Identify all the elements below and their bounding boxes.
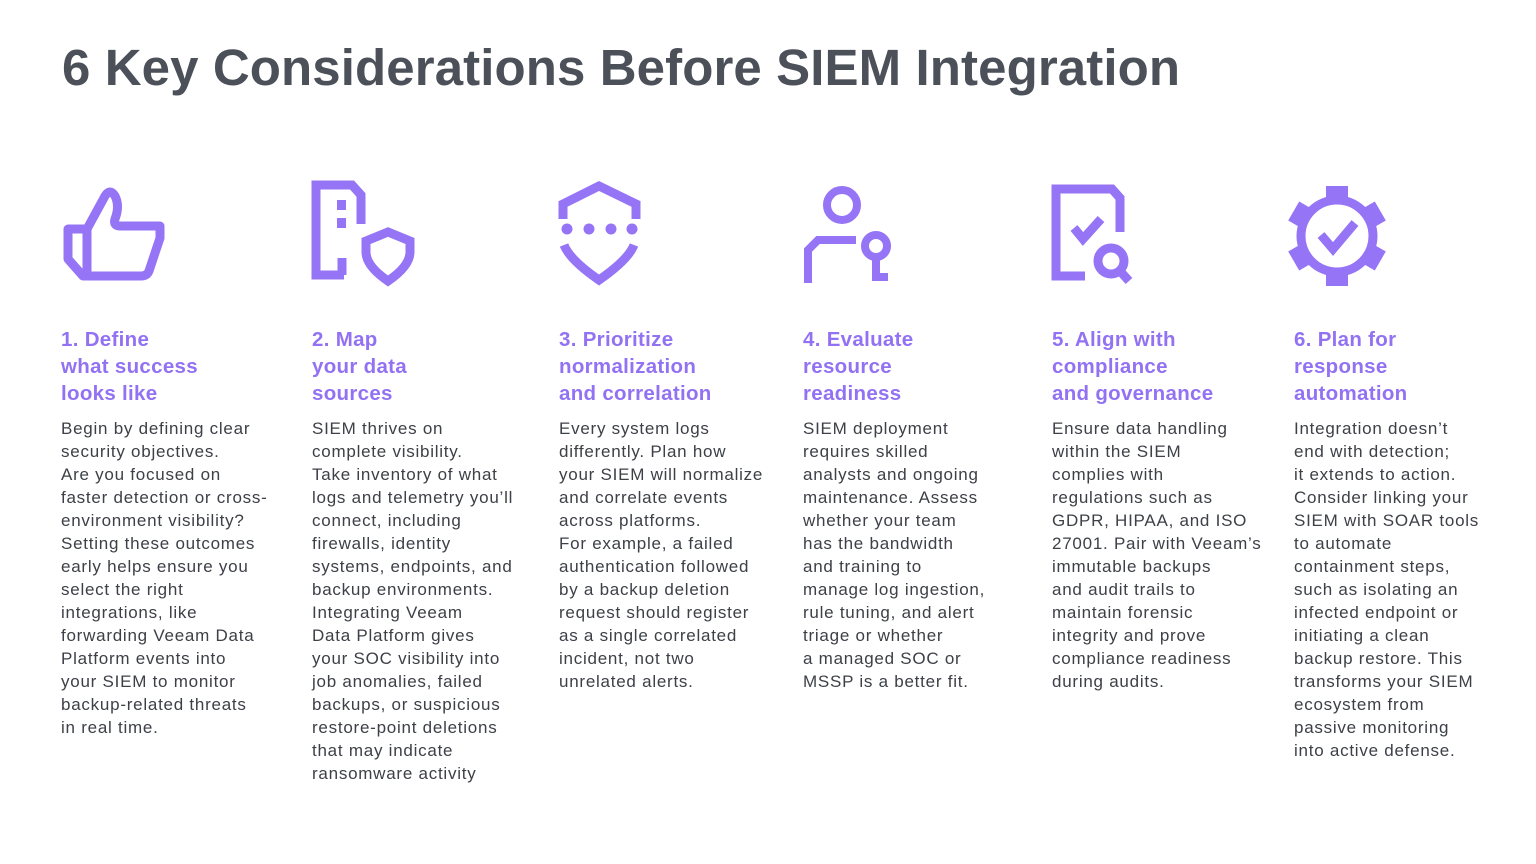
column 3: 3. Prioritize [559, 328, 673, 351]
column 3: and correlation [559, 382, 712, 405]
column 1 [61, 328, 268, 737]
column 2: job anomalies, failed [312, 672, 483, 691]
column 1: forwarding Veeam Data [61, 626, 254, 645]
column 5: compliance readiness [1052, 649, 1231, 668]
column 1: security objectives. [61, 442, 220, 461]
column 6: passive monitoring [1294, 718, 1449, 737]
column 1: backup-related threats [61, 695, 247, 714]
column 1: Platform events into [61, 649, 226, 668]
column 5: and audit trails to [1052, 580, 1196, 599]
column 5: maintain forensic [1052, 603, 1193, 622]
column 6: to automate [1294, 534, 1392, 553]
column 2: backup environments. [312, 580, 493, 599]
column 1: Are you focused on [61, 465, 221, 484]
column 1: faster detection or cross- [61, 488, 268, 507]
column 1: early helps ensure you [61, 557, 249, 576]
column 3: across platforms. [559, 511, 701, 530]
column 5: regulations such as [1052, 488, 1213, 507]
column 1: Begin by defining clear [61, 419, 250, 438]
column 4: triage or whether [803, 626, 943, 645]
column 4: whether your team [803, 511, 957, 530]
column 3: differently. Plan how [559, 442, 726, 461]
column 3: Every system logs [559, 419, 710, 438]
column 4: and training to [803, 557, 922, 576]
column 2: backups, or suspicious [312, 695, 500, 714]
column 1: what success [61, 355, 198, 378]
column 4 [803, 328, 985, 691]
column 6: Consider linking your [1294, 488, 1468, 507]
column 4: manage log ingestion, [803, 580, 985, 599]
column 6: initiating a clean [1294, 626, 1429, 645]
column 6: infected endpoint or [1294, 603, 1458, 622]
column 3: normalization [559, 355, 696, 378]
column 2: ransomware activity [312, 764, 476, 783]
column 6: SIEM with SOAR tools [1294, 511, 1479, 530]
column 5: complies with [1052, 465, 1164, 484]
column 4: maintenance. Assess [803, 488, 978, 507]
column 2: Integrating Veeam [312, 603, 463, 622]
column 1: select the right [61, 580, 184, 599]
column 4: readiness [803, 382, 901, 405]
column 6: such as isolating an [1294, 580, 1458, 599]
column 2: your data [312, 355, 407, 378]
column 5: 27001. Pair with Veeam’s [1052, 534, 1262, 553]
column 5 [1052, 328, 1262, 691]
column 6: end with detection; [1294, 442, 1450, 461]
column 3: your SIEM will normalize [559, 465, 763, 484]
column 6: automation [1294, 382, 1407, 405]
column 2: your SOC visibility into [312, 649, 500, 668]
column 2: Data Platform gives [312, 626, 475, 645]
column 2: firewalls, identity [312, 534, 451, 553]
column 2: restore-point deletions [312, 718, 497, 737]
column 2 [312, 328, 513, 783]
column 5: within the SIEM [1052, 442, 1181, 461]
column 6: Integration doesn’t [1294, 419, 1448, 438]
column 3: For example, a failed [559, 534, 734, 553]
column 3: by a backup deletion [559, 580, 730, 599]
column 4: has the bandwidth [803, 534, 954, 553]
column 3: incident, not two [559, 649, 695, 668]
column 4: SIEM deployment [803, 419, 948, 438]
column 5: and governance [1052, 382, 1213, 405]
column 1: in real time. [61, 718, 159, 737]
icon: building with shield [316, 185, 410, 281]
column 5: integrity and prove [1052, 626, 1206, 645]
column 2: sources [312, 382, 393, 405]
column 6: ecosystem from [1294, 695, 1424, 714]
column 2: 2. Map [312, 328, 378, 351]
column 6: containment steps, [1294, 557, 1450, 576]
column 1: your SIEM to monitor [61, 672, 236, 691]
column 6 [1294, 328, 1479, 760]
column 3: authentication followed [559, 557, 749, 576]
column 6: backup restore. This [1294, 649, 1463, 668]
column 2: systems, endpoints, and [312, 557, 513, 576]
column 1: Setting these outcomes [61, 534, 255, 553]
column 3 [559, 328, 763, 691]
column 3: request should register [559, 603, 749, 622]
column 1: environment visibility? [61, 511, 245, 530]
column 3: unrelated alerts. [559, 672, 694, 691]
column 1: looks like [61, 382, 157, 405]
icon: gear check [1288, 186, 1386, 286]
column 6: into active defense. [1294, 741, 1455, 760]
column 6: transforms your SIEM [1294, 672, 1473, 691]
column 4: resource [803, 355, 892, 378]
column 2: Take inventory of what [312, 465, 498, 484]
icon: shield with dots [562, 186, 638, 280]
icons [64, 180, 1386, 286]
column 4: analysts and ongoing [803, 465, 979, 484]
column 6: response [1294, 355, 1388, 378]
column 1: 1. Define [61, 328, 149, 351]
title: 6 Key Considerations Before SIEM Integration [62, 39, 1180, 96]
column 4: 4. Evaluate [803, 328, 913, 351]
column 3: and correlate events [559, 488, 728, 507]
column 4: rule tuning, and alert [803, 603, 974, 622]
column 5: Ensure data handling [1052, 419, 1228, 438]
icon: person with key [808, 190, 888, 283]
column 6: 6. Plan for [1294, 328, 1396, 351]
column 4: a managed SOC or [803, 649, 961, 668]
column 4: MSSP is a better fit. [803, 672, 969, 691]
column 2: logs and telemetry you’ll [312, 488, 513, 507]
column 2: that may indicate [312, 741, 453, 760]
column 5: GDPR, HIPAA, and ISO [1052, 511, 1247, 530]
column 5: during audits. [1052, 672, 1165, 691]
column 2: connect, including [312, 511, 462, 530]
column 6: it extends to action. [1294, 465, 1456, 484]
column 2: SIEM thrives on [312, 419, 443, 438]
icon: thumbs up [68, 192, 160, 276]
column 4: requires skilled [803, 442, 928, 461]
column 5: compliance [1052, 355, 1168, 378]
column 5: 5. Align with [1052, 328, 1176, 351]
column 5: immutable backups [1052, 557, 1211, 576]
column 1: integrations, like [61, 603, 197, 622]
column 2: complete visibility. [312, 442, 463, 461]
column 3: as a single correlated [559, 626, 737, 645]
icon: document check magnifier [1056, 189, 1129, 281]
